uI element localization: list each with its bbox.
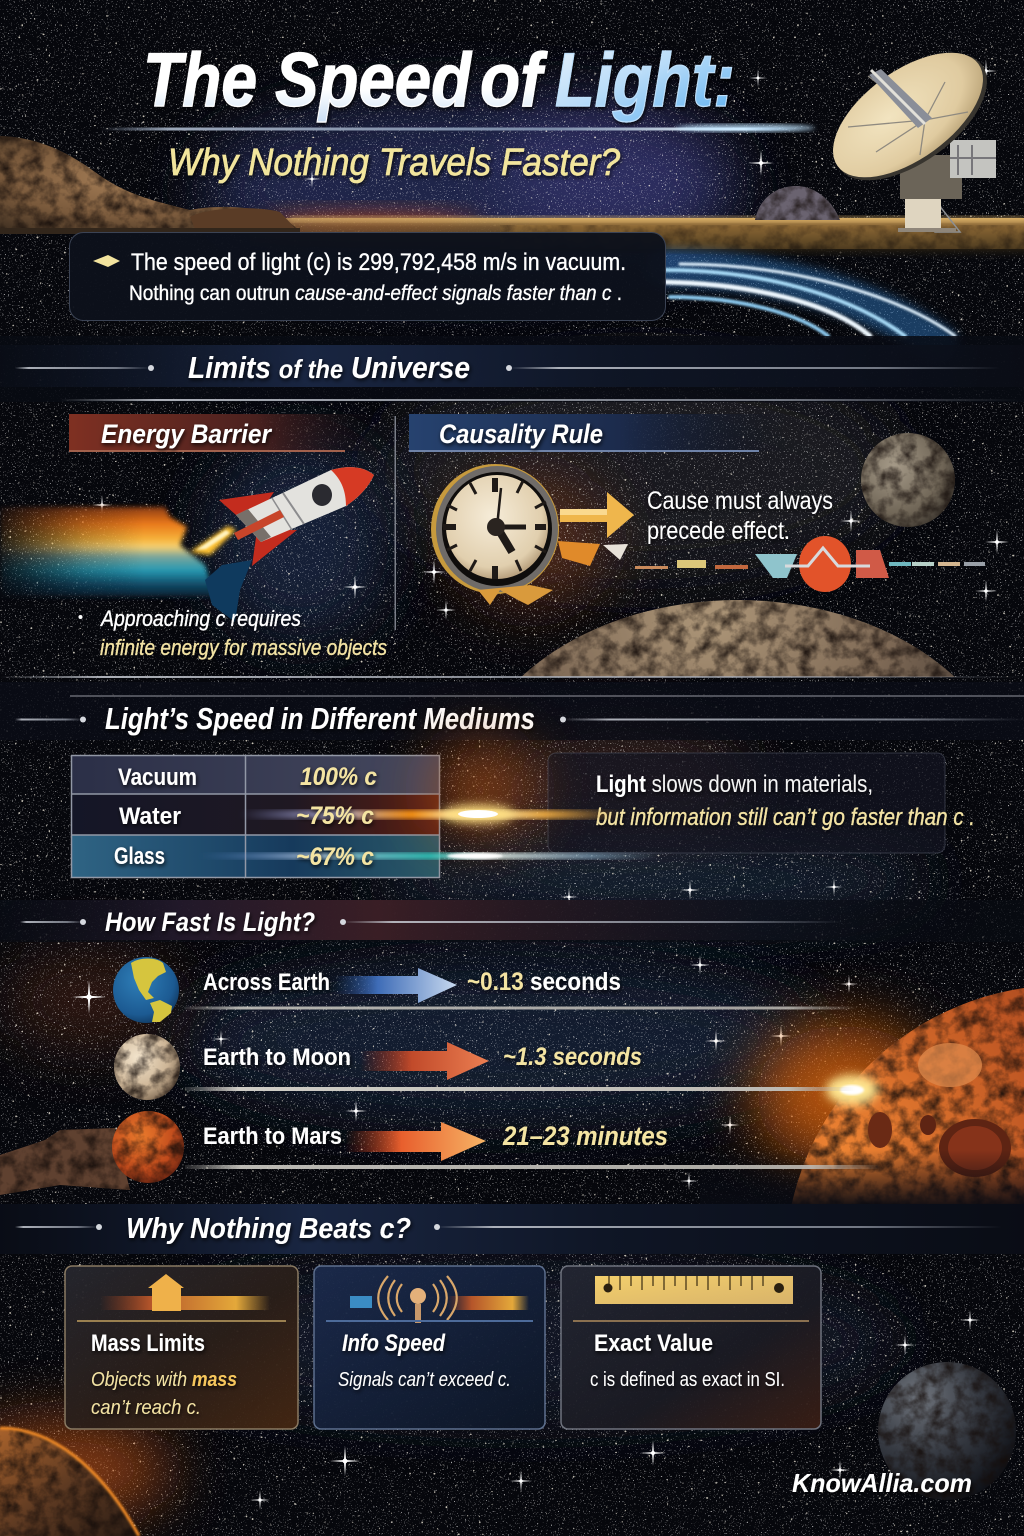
card body: c is defined as exact in SI. [590,1369,785,1391]
section heading: limits [0,336,1024,402]
lower-left planet [0,1420,170,1536]
row labels [114,764,197,870]
callout: light slows down [548,753,975,853]
card: exact value [561,1266,821,1429]
distant moon dome [755,186,840,220]
intro line 2: Nothing can outrun cause-and-effect signals faster than c . [129,282,622,305]
section heading: limits: Limits of the Universe [188,350,470,385]
heading: energy barrier: Energy Barrier [101,419,272,449]
row: earth to moon [114,1034,855,1100]
value: ~1.3 seconds [503,1043,642,1071]
light streaks [665,264,955,345]
row values [296,763,377,871]
heading: causality rule: Causality Rule [439,419,603,449]
callout line 1: Light slows down in materials, [596,771,873,798]
row values: ~75% c [296,802,374,830]
card title: Exact Value [594,1330,713,1357]
icon: mass arrow [100,1274,270,1311]
card body: Objects with mass [91,1369,237,1391]
section heading: mediums: Light’s Speed in Different Mediums [105,701,535,736]
causality text [647,487,833,545]
row values: 100% c [300,763,377,791]
row labels: Glass [114,843,165,870]
panel: energy barrier [0,414,387,660]
title [100,38,815,184]
panel: causality rule [409,414,1013,1000]
title line 1: The [143,38,257,123]
value: ~0.13 seconds [467,968,621,996]
title line 1: Speed [275,38,472,123]
icon: diamond bullet [93,255,120,267]
section heading: why nothing beats c [0,1204,1024,1254]
card title: Info Speed [342,1330,446,1357]
heading: causality rule [409,414,790,452]
icon: radio telescope dish [812,28,1009,232]
icon: moon [114,1034,180,1100]
exhaust beam [0,507,252,622]
card body [91,1369,237,1419]
energy barrier text: infinite energy for massive objects [100,635,387,660]
section heading: how fast: How Fast Is Light? [105,907,315,937]
section heading: why nothing beats c: Why Nothing Beats c? [126,1213,411,1245]
beam: water [240,805,620,823]
landscape: rocky horizon [0,136,1024,262]
causality text: precede effect. [647,517,790,545]
energy barrier text: Approaching c requires [99,606,301,631]
icon: signal antenna [350,1276,529,1323]
value: 21–23 minutes [502,1121,668,1151]
intro line 1: The speed of light (c) is 299,792,458 m/s in vacuum. [131,249,626,276]
lower-right moon [878,1362,1016,1500]
heading: energy barrier [69,414,380,452]
icon: mars [112,1111,184,1183]
arrow [335,968,457,1003]
icon: earth [113,957,179,1023]
row labels: Water [119,803,181,830]
title rule [100,124,815,132]
icon: clock [431,464,559,605]
asteroid [0,1128,130,1195]
row values: ~67% c [296,843,374,871]
row label: Earth to Moon [203,1044,351,1071]
section heading: mediums [0,682,1024,740]
card title: Mass Limits [91,1330,205,1357]
section heading: how fast [0,900,1024,942]
row label: Across Earth [203,969,330,996]
subtitle: Why Nothing Travels Faster? [168,142,621,184]
footer brand: KnowAllia.com [792,1468,972,1498]
energy barrier text [78,606,387,660]
card: info speed [314,1266,545,1429]
title line 1: Light: [555,38,735,123]
glow behind beams [430,740,530,840]
beam: glass [200,853,660,859]
causality text: Cause must always [647,487,833,515]
card body: Signals can’t exceed c. [338,1369,511,1391]
row: earth to mars [112,1111,880,1183]
title line 1: of [480,38,548,123]
title line 1 [143,38,735,123]
card body: can’t reach c. [91,1397,201,1419]
row label: Earth to Mars [203,1123,342,1150]
card: mass limits [65,1266,298,1429]
intro panel [70,232,666,320]
timeline: event signal [635,536,985,592]
icon: planet [522,600,955,677]
row: across earth [113,957,857,1023]
icon: moon [861,433,955,527]
arrow: cause to effect [558,492,634,566]
table: speed by medium [71,740,660,878]
icon: ruler [595,1276,793,1304]
arrow [360,1042,489,1080]
row labels: Vacuum [118,764,197,791]
arrow [345,1122,486,1161]
big Mars [700,980,1024,1204]
icon: rocket [219,467,374,566]
